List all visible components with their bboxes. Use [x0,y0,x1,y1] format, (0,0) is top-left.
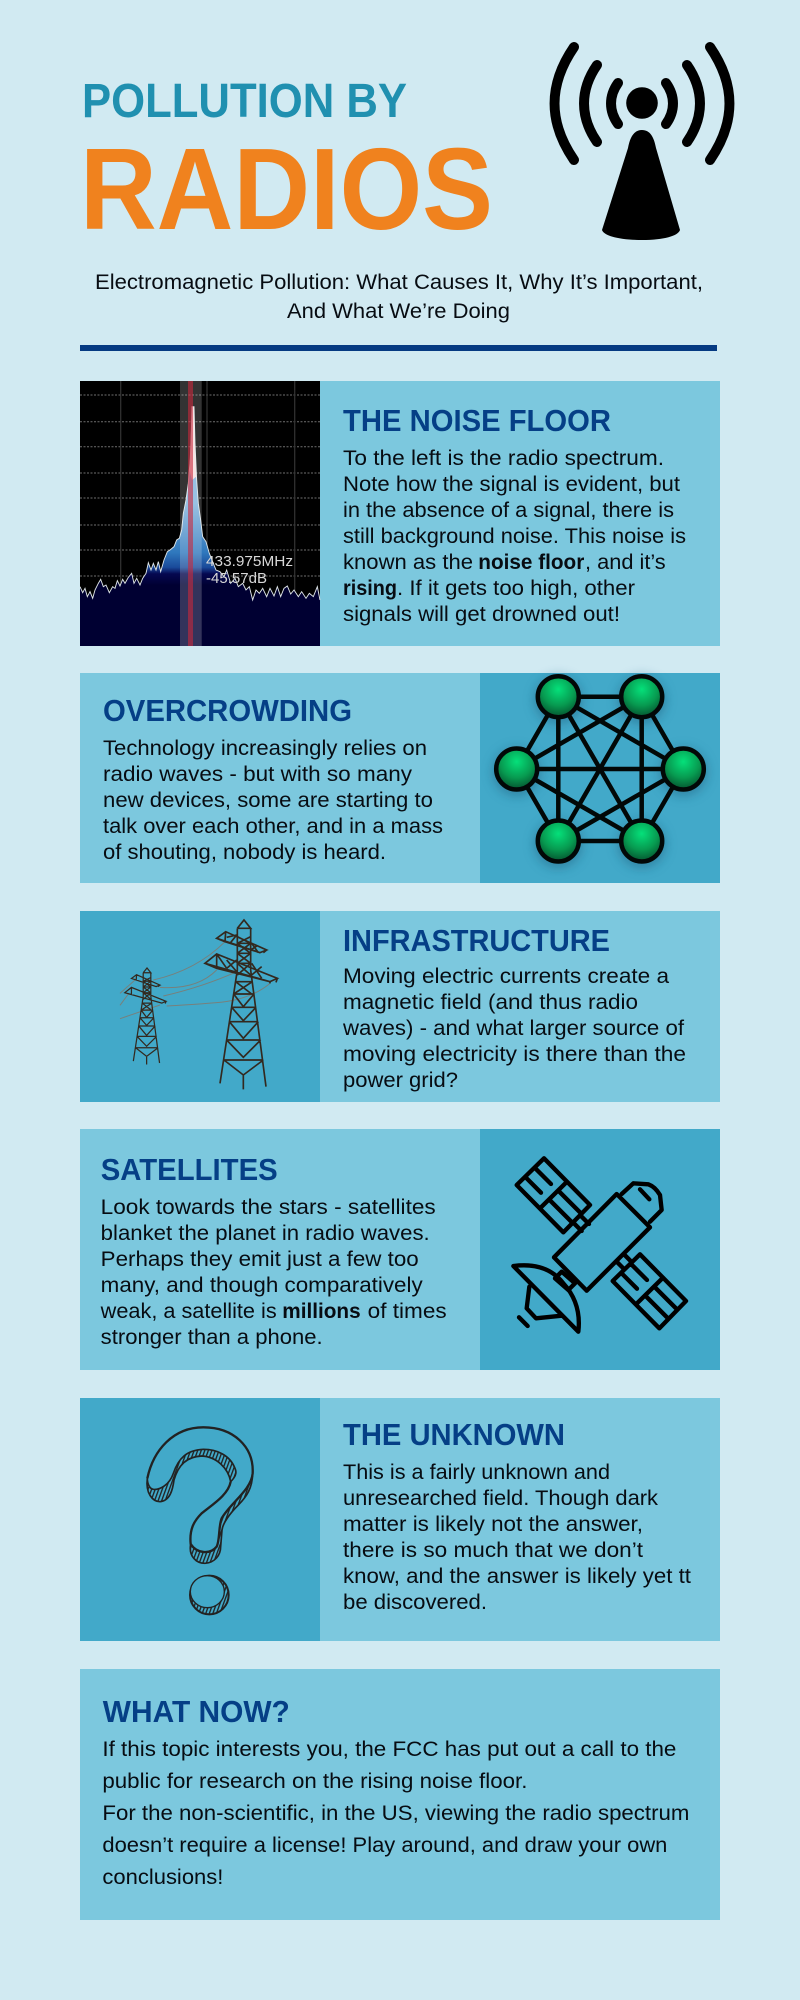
panel: what now [80,1669,720,1920]
panel: infrastructure [80,911,720,1102]
body text: satellites: weak, a satellite is [100,1299,277,1323]
body text: infrastructure: power grid? [343,1068,458,1092]
chart: radio spectrum [80,381,320,646]
icon: power pylons [120,920,277,1089]
body text: the unknown [343,1460,691,1614]
icon: mesh network [494,676,706,867]
body text: satellites: stronger than a phone. [101,1325,323,1349]
body text: the noise floor [343,446,686,626]
body text: the unknown: unresearched field. Though dark [343,1486,658,1510]
body text: satellites: of times [368,1299,447,1323]
icon: satellite [513,1158,686,1332]
body text: overcrowding [103,736,443,864]
body text: infrastructure: Moving electric currents create a [343,964,669,988]
panel: the noise floor [80,381,720,646]
body text: the noise floor: signals will get drowned out! [343,602,620,626]
body text: satellites: millions [282,1299,361,1323]
body text: the noise floor: To the left is the radio spectrum. [343,446,664,470]
body text: satellites: many, and though comparatively [101,1273,423,1297]
body text: the unknown: matter is likely not the answer, [343,1512,643,1536]
heading: overcrowding: OVERCROWDING [103,694,352,728]
body text: infrastructure: moving electricity is there than the [343,1042,686,1066]
body text: what now: doesn’t require a license! Play around, and draw your own [102,1833,667,1857]
icon: question mark [147,1427,253,1614]
body text: what now: If this topic interests you, the FCC has put out a call to the [102,1737,676,1761]
body text: satellites: Perhaps they emit just a few too [101,1247,419,1271]
heading: what now: WHAT NOW? [103,1695,290,1729]
body text: the noise floor: still background noise. This noise is [343,524,686,548]
body text: infrastructure: waves) - and what larger source of [342,1016,684,1040]
body text: satellites [100,1195,447,1349]
panel: overcrowding [80,673,720,883]
chart: radio spectrum: -45.57dB [206,570,267,587]
body text: the noise floor: . If it gets too high, other [397,576,635,600]
subtitle: And What We’re Doing [287,299,510,323]
icon: radio antenna [554,47,730,240]
body text: what now: For the non-scientific, in the US, viewing the radio spectrum [102,1801,689,1825]
body text: the noise floor: in the absence of a signal, there is [343,498,674,522]
panel: the unknown [80,1398,720,1641]
body text: the noise floor: , and it’s [585,550,666,574]
subtitle [95,270,703,323]
body text: the noise floor: rising [343,576,397,600]
body text: infrastructure [342,964,686,1092]
heading: the noise floor: THE NOISE FLOOR [343,404,611,438]
panel: satellites [80,1129,720,1370]
body text: overcrowding: of shouting, nobody is heard. [103,840,386,864]
body text: overcrowding: talk over each other, and in a mass [103,814,443,838]
body text: the unknown: This is a fairly unknown and [343,1460,610,1484]
body text: overcrowding: Technology increasingly relies on [103,736,427,760]
body text: what now: conclusions! [102,1865,223,1889]
subtitle: Electromagnetic Pollution: What Causes It, Why It’s Important, [95,270,703,294]
body text: the noise floor: known as the [343,550,473,574]
body text: what now [102,1737,689,1889]
title line: radios: RADIOS [80,124,493,254]
body text: the unknown: there is so much that we don’t [343,1538,643,1562]
body text: infrastructure: magnetic field (and thus radio [343,990,638,1014]
body text: overcrowding: new devices, some are starting to [103,788,433,812]
body text: the noise floor: noise floor [478,550,585,574]
body text: overcrowding: radio waves - but with so many [103,762,412,786]
heading: satellites: SATELLITES [101,1153,278,1187]
body text: satellites: blanket the planet in radio waves. [101,1221,430,1245]
body text: satellites: Look towards the stars - satellites [101,1195,436,1219]
body text: the unknown: be discovered. [343,1590,487,1614]
title [80,75,493,254]
body text: the unknown: know, and the answer is likely yet tt [343,1564,691,1588]
heading: infrastructure: INFRASTRUCTURE [343,924,610,958]
chart: radio spectrum: 433.975MHz [206,553,293,570]
heading: the unknown: THE UNKNOWN [343,1418,565,1452]
title line: pollution by: POLLUTION BY [82,75,407,128]
body text: the noise floor: Note how the signal is evident, but [343,472,680,496]
body text: what now: public for research on the rising noise floor. [102,1769,527,1793]
